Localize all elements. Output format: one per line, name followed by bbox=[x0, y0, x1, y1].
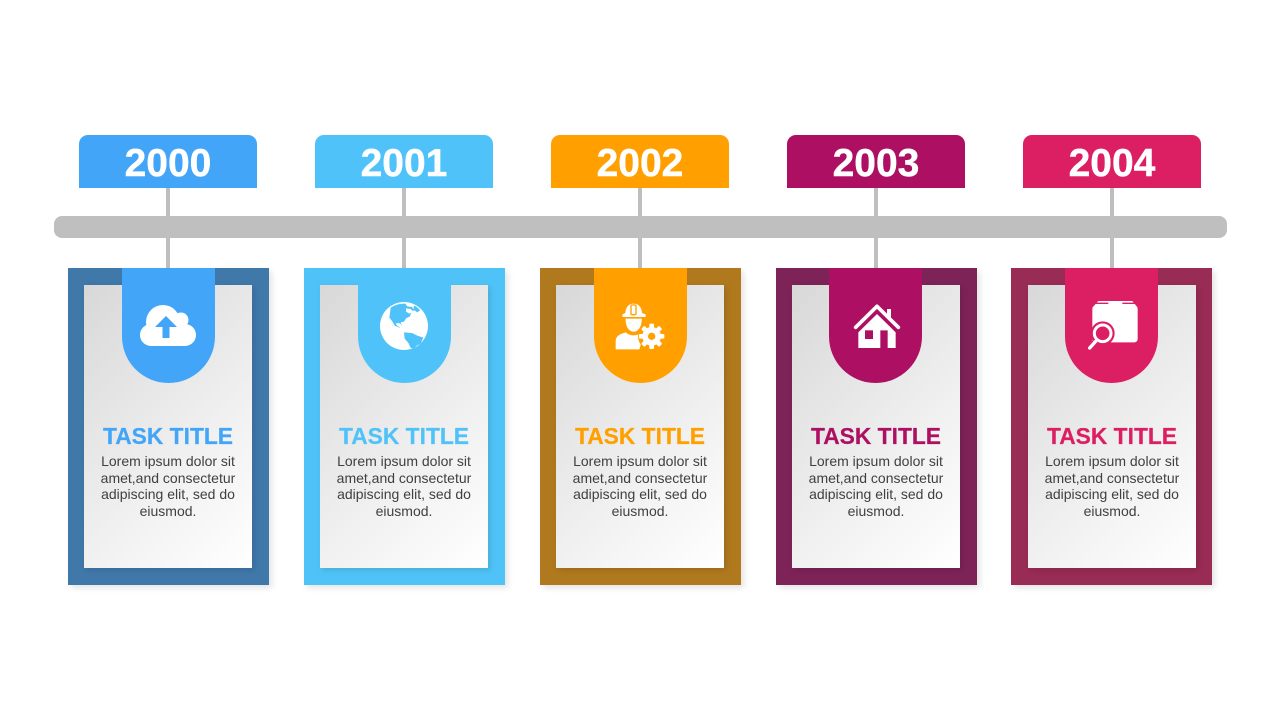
task description: eiusmod. bbox=[1084, 503, 1140, 519]
task description: adipiscing elit, sed do bbox=[809, 486, 943, 502]
icon: globe bbox=[380, 302, 428, 350]
card inner panel bbox=[556, 285, 724, 568]
panel: 2002 task card bbox=[540, 268, 740, 585]
task description: Lorem ipsum dolor sit bbox=[101, 453, 235, 469]
task description: eiusmod. bbox=[612, 503, 668, 519]
timeline bar bbox=[54, 216, 1227, 238]
task description bbox=[101, 453, 236, 519]
year label: 2003 bbox=[787, 135, 965, 188]
connector: 2003 bbox=[874, 188, 878, 268]
connector: 2001 bbox=[402, 188, 406, 268]
task description: Lorem ipsum dolor sit bbox=[1045, 453, 1179, 469]
task description bbox=[809, 453, 944, 519]
task description: eiusmod. bbox=[140, 503, 196, 519]
card inner panel bbox=[1028, 285, 1196, 568]
task description: eiusmod. bbox=[848, 503, 904, 519]
task description: adipiscing elit, sed do bbox=[337, 486, 471, 502]
panel: 2000 task card bbox=[68, 268, 268, 585]
card inner panel bbox=[320, 285, 488, 568]
task description bbox=[1045, 453, 1180, 519]
card inner panel bbox=[792, 285, 960, 568]
task description: eiusmod. bbox=[376, 503, 432, 519]
icon: house bbox=[854, 304, 900, 348]
task title: TASK TITLE bbox=[339, 423, 469, 449]
year label: 2003: 2003 bbox=[833, 142, 919, 185]
task title: TASK TITLE bbox=[1047, 423, 1177, 449]
year label: 2000 bbox=[79, 135, 257, 188]
tab with globe icon bbox=[358, 268, 451, 383]
task description: amet,and consectetur bbox=[809, 470, 943, 486]
year label: 2001 bbox=[315, 135, 493, 188]
connector: 2000 bbox=[166, 188, 170, 268]
year label: 2001: 2001 bbox=[361, 142, 447, 185]
task description: adipiscing elit, sed do bbox=[101, 486, 235, 502]
task title: TASK TITLE bbox=[103, 423, 233, 449]
tab with engineer icon bbox=[594, 268, 686, 383]
icon: engineer with gear bbox=[616, 304, 664, 350]
task description: adipiscing elit, sed do bbox=[1045, 486, 1179, 502]
tab with cloud upload icon bbox=[122, 268, 215, 383]
task description: Lorem ipsum dolor sit bbox=[573, 453, 707, 469]
task description: adipiscing elit, sed do bbox=[573, 486, 707, 502]
tab with box search icon bbox=[1065, 268, 1158, 383]
task description bbox=[337, 453, 472, 519]
icon: cloud upload bbox=[140, 305, 196, 346]
panel: 2004 task card bbox=[1011, 268, 1212, 585]
task description: amet,and consectetur bbox=[573, 470, 707, 486]
task description: Lorem ipsum dolor sit bbox=[337, 453, 471, 469]
connector: 2002 bbox=[638, 188, 642, 268]
card inner panel bbox=[84, 285, 252, 568]
year label: 2002 bbox=[551, 135, 729, 188]
icon: package search bbox=[1088, 301, 1138, 350]
task title: TASK TITLE bbox=[575, 423, 705, 449]
task description: amet,and consectetur bbox=[1045, 470, 1179, 486]
panel: 2003 task card bbox=[776, 268, 976, 585]
tab with house icon bbox=[829, 268, 922, 383]
connector: 2004 bbox=[1110, 188, 1114, 268]
task description: amet,and consectetur bbox=[337, 470, 471, 486]
year label: 2004: 2004 bbox=[1069, 142, 1155, 185]
year label: 2004 bbox=[1023, 135, 1201, 188]
task description: Lorem ipsum dolor sit bbox=[809, 453, 943, 469]
task description: amet,and consectetur bbox=[101, 470, 235, 486]
year label: 2000: 2000 bbox=[125, 142, 211, 185]
panel: 2001 task card bbox=[304, 268, 504, 585]
task description bbox=[573, 453, 708, 519]
task title: TASK TITLE bbox=[811, 423, 941, 449]
year label: 2002: 2002 bbox=[597, 142, 683, 185]
